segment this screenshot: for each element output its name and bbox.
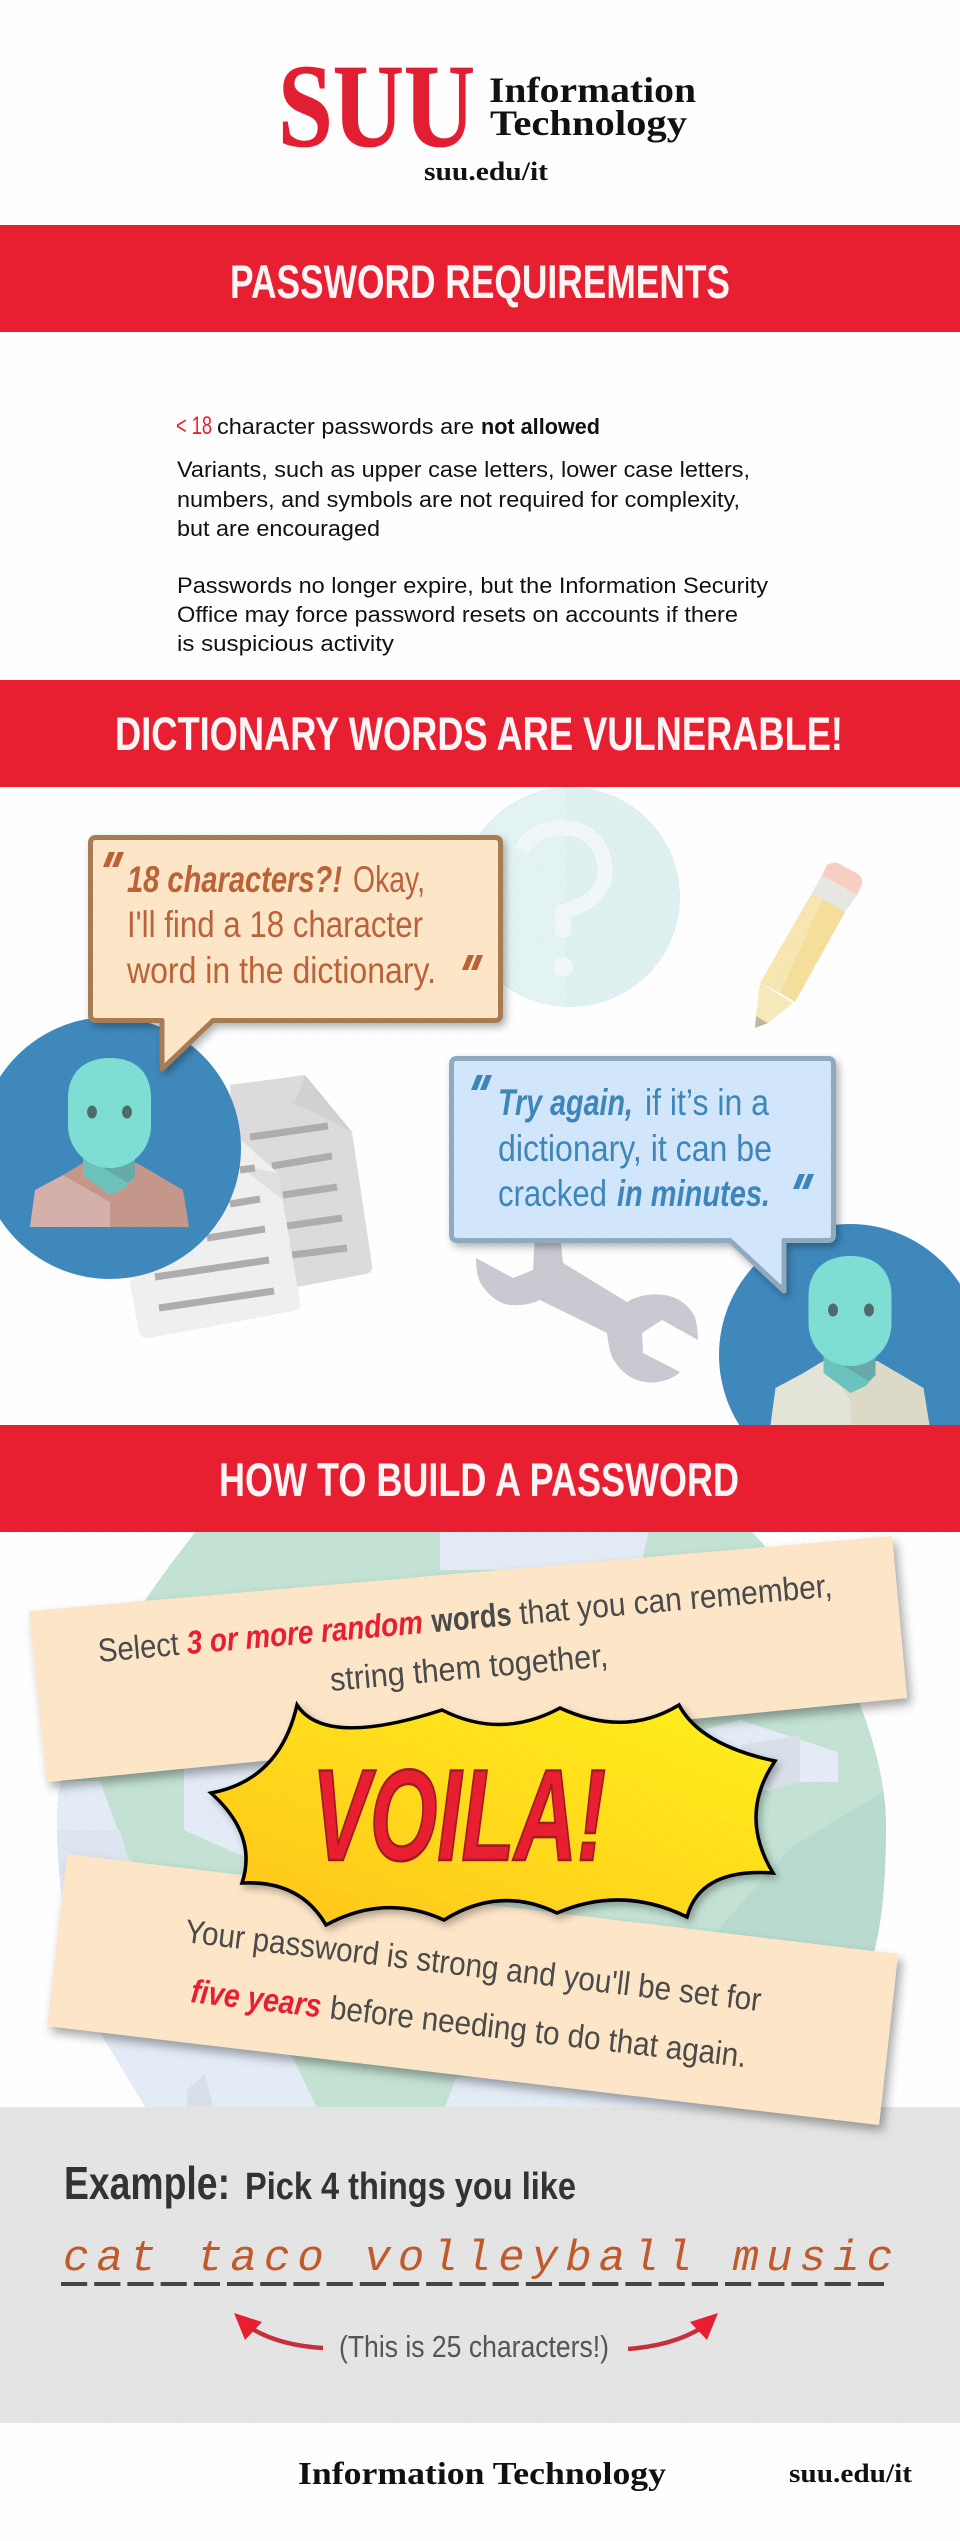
- panel: globe background art: [56, 1532, 886, 2107]
- person 1 eyes: [87, 1106, 132, 1118]
- panel: example: [61, 2157, 893, 2364]
- banner: password requirements: PASSWORD REQUIREMENTS: [230, 255, 730, 308]
- Information Technology wordmark: [489, 70, 696, 143]
- example heading: [64, 2157, 576, 2209]
- example password: cat taco volleyball music: [63, 2234, 893, 2284]
- strip text: words: [429, 1595, 513, 1639]
- strip text: [96, 1567, 834, 1669]
- header url: suu.edu/it: [424, 157, 548, 186]
- icon: close quote: [793, 1174, 814, 1189]
- bubble text: [126, 859, 436, 991]
- panel: dictionary scene background art: [0, 787, 960, 1486]
- bubble text: 18 characters?!: [127, 859, 342, 900]
- strip text: that you can remember,: [518, 1567, 834, 1631]
- bubble text: Try again,: [498, 1082, 633, 1123]
- Information Technology wordmark: Information: [489, 70, 696, 110]
- bubble text: in minutes.: [617, 1173, 770, 1214]
- speech bubble: person 2: [452, 1058, 834, 1291]
- banner: how to build a password: HOW TO BUILD A PASSWORD: [219, 1453, 739, 1506]
- rule: complexity: [177, 457, 750, 541]
- character count note: (This is 25 characters!): [339, 2329, 609, 2364]
- icon: question mark circle: [460, 787, 680, 1007]
- icon: close quote: [462, 955, 483, 970]
- strip: select words: [29, 1536, 907, 1782]
- rule: expiry: is suspicious activity: [177, 631, 394, 656]
- banner: dictionary words: [0, 680, 960, 787]
- strip text line 2: five years: [189, 1972, 324, 2024]
- person 2 head: [808, 1256, 892, 1366]
- back sheet: [230, 1075, 372, 1287]
- footer url: suu.edu/it: [789, 2459, 912, 2488]
- speech bubble: person 1: [90, 838, 500, 1069]
- voila text: VOILA!: [312, 1742, 606, 1888]
- person 2 eyes: [828, 1304, 874, 1316]
- rule: minimum length: not allowed: [481, 414, 600, 439]
- bubble text: word in the dictionary.: [126, 950, 436, 991]
- rule: minimum length: [176, 412, 600, 440]
- character: person 2: [719, 1224, 960, 1425]
- panel: example background: [0, 2107, 960, 2423]
- dashed underline: [61, 2282, 890, 2286]
- rule: minimum length: character passwords are: [217, 414, 474, 439]
- character: person 1: [0, 1017, 241, 1279]
- strip text: 3 or more random: [185, 1603, 424, 1661]
- banner: password requirements: [0, 225, 960, 332]
- example heading: Pick 4 things you like: [245, 2166, 576, 2208]
- arrow: left: [234, 2313, 323, 2348]
- rule: minimum length: < 18: [176, 412, 212, 440]
- rule: complexity: but are encouraged: [177, 516, 380, 541]
- person 1 body: [30, 1163, 189, 1227]
- rule: complexity: Variants, such as upper case letters, lower case letters,: [177, 457, 750, 482]
- front sheet: [130, 1130, 300, 1338]
- bubble text: I'll find a 18 character: [127, 904, 423, 945]
- starburst: voila: [211, 1705, 775, 1925]
- strip text line 2: string them together,: [328, 1636, 610, 1698]
- arrow: right: [628, 2313, 718, 2349]
- icon: pencil: [755, 863, 862, 1028]
- strip text line 2: before needing to do that again.: [328, 1989, 749, 2074]
- bubble text: dictionary, it can be: [498, 1128, 772, 1169]
- strip text line 1: Your password is strong and you'll be set for: [183, 1912, 763, 2018]
- icon: document sheets: [130, 1075, 372, 1338]
- person 2 neck: [824, 1356, 876, 1393]
- SUU wordmark: SUU: [278, 40, 475, 172]
- icon: wrench: [476, 1235, 698, 1383]
- footer: [298, 2455, 912, 2491]
- person 1 head: [68, 1058, 151, 1168]
- rule: expiry: Passwords no longer expire, but the Information Security: [177, 573, 768, 598]
- bubble text: cracked: [498, 1173, 607, 1214]
- person 2 body: [770, 1361, 930, 1425]
- example heading: Example:: [64, 2157, 230, 2209]
- rule: expiry: [177, 573, 768, 656]
- panel: requirements text: [176, 412, 768, 656]
- person 1 neck: [83, 1158, 135, 1195]
- Information Technology wordmark: Technology: [490, 103, 687, 143]
- rule: expiry: Office may force password resets on accounts if there: [177, 602, 738, 627]
- bubble text: [498, 1082, 772, 1214]
- bubble text: Okay,: [353, 859, 425, 900]
- bubble text: if it’s in a: [645, 1082, 769, 1123]
- strip text: Select: [96, 1625, 180, 1669]
- rule: complexity: numbers, and symbols are not required for complexity,: [177, 487, 740, 512]
- banner: how to build a password: [0, 1425, 960, 1532]
- strip: strong password: [47, 1854, 898, 2125]
- icon: open quote: [471, 1075, 492, 1090]
- footer wordmark: Information Technology: [298, 2455, 666, 2491]
- icon: open quote: [103, 852, 124, 867]
- strip text line 2: [189, 1972, 749, 2074]
- header logo: [278, 40, 696, 186]
